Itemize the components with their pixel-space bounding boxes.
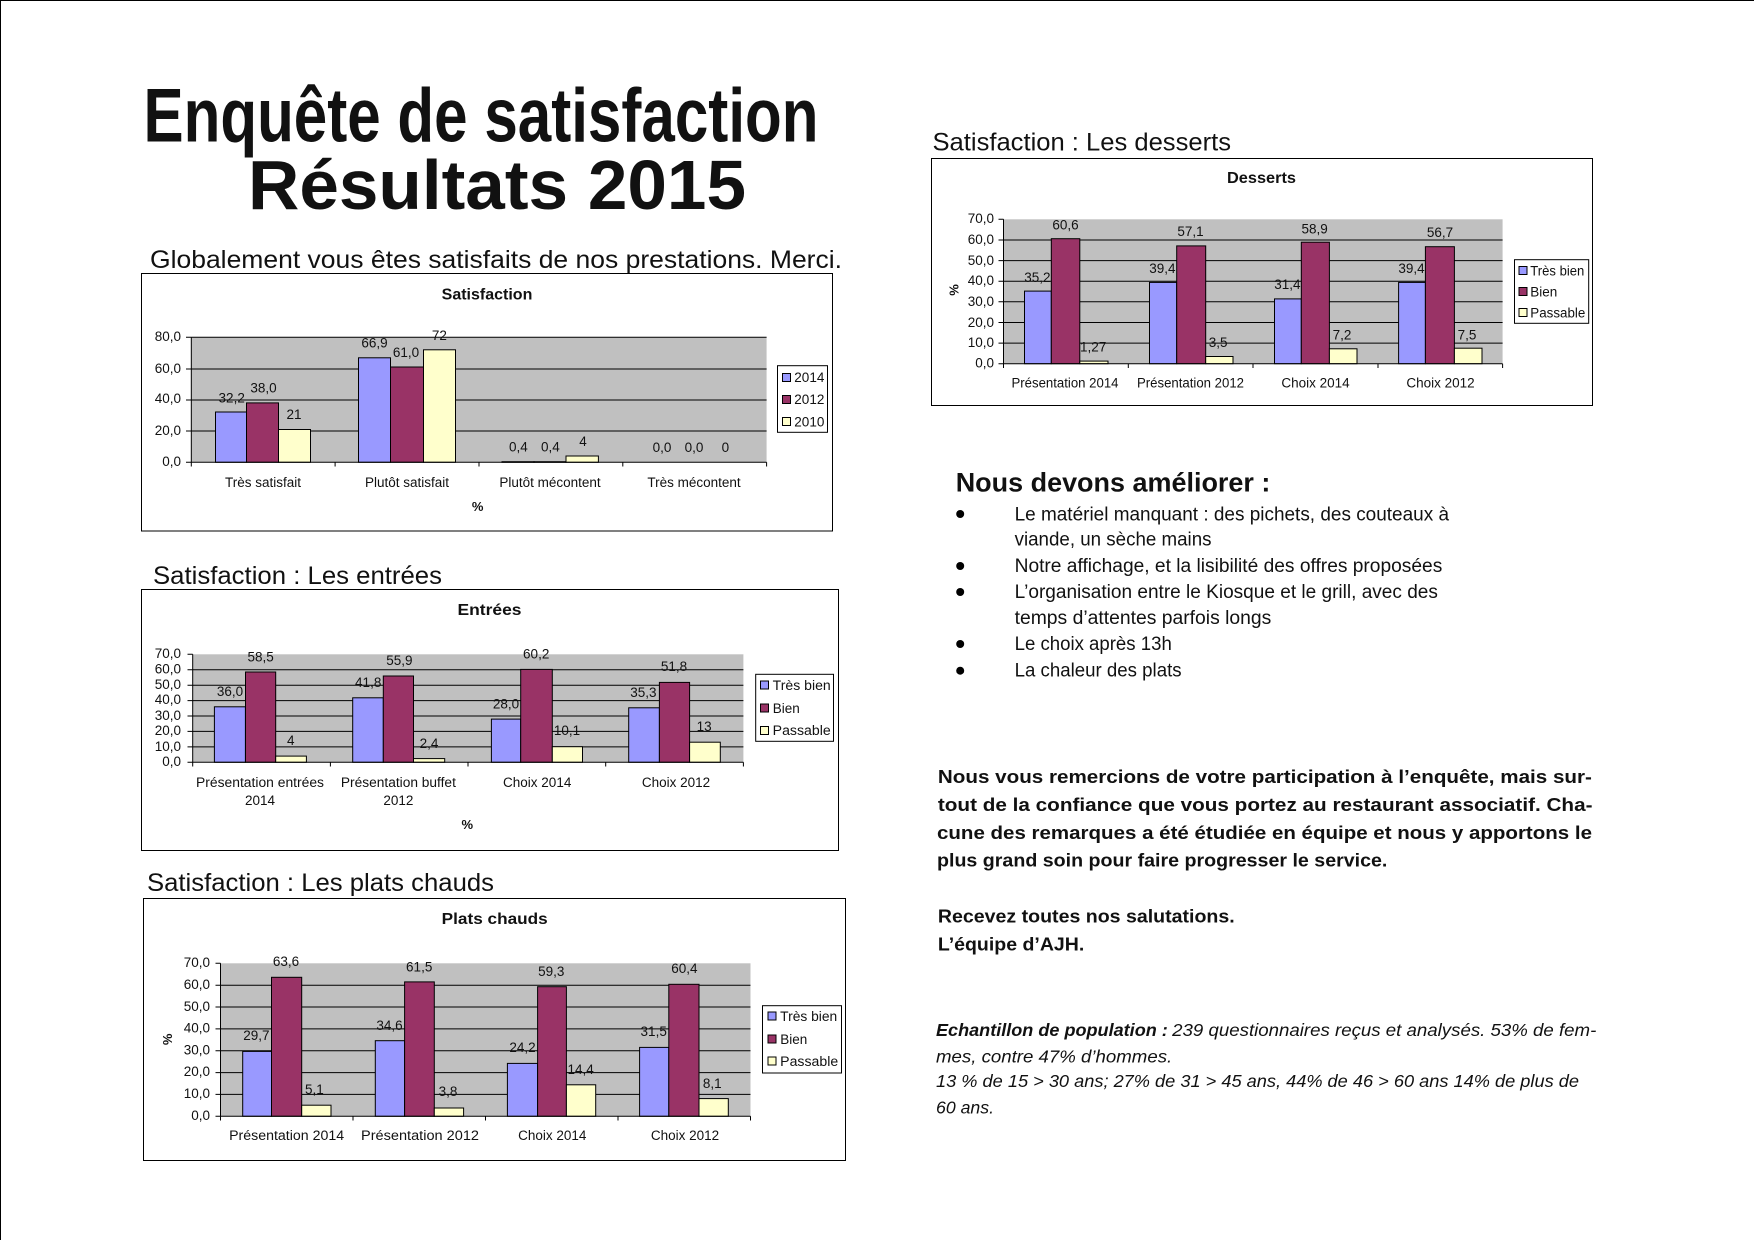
bullet list: viande, un sèche mains	[1015, 529, 1212, 550]
data labels	[1024, 218, 1476, 354]
legend: 2010	[794, 414, 824, 430]
category labels: Présentation entrées	[196, 775, 324, 790]
data labels: 39,4	[1398, 261, 1425, 276]
axes	[188, 654, 743, 766]
axes	[216, 963, 750, 1120]
data labels: 41,8	[355, 675, 381, 690]
axis label: %	[462, 817, 474, 832]
data labels: 8,1	[703, 1076, 722, 1091]
data labels: 7,5	[1458, 328, 1476, 342]
text block: thanks	[937, 766, 1592, 955]
legend: 2012	[794, 392, 824, 407]
panel: chart Desserts	[932, 158, 1592, 406]
text block: population sample: 239 questionnaires reçus et analysés. 53% de fem-	[1171, 1020, 1596, 1040]
y axis labels: 40,0	[968, 273, 994, 288]
bullet list: temps d’attentes parfois longs	[1015, 608, 1271, 629]
category labels: Plutôt mécontent	[499, 475, 601, 490]
y axis labels: 0,0	[162, 454, 181, 469]
title: Résultats 2015	[248, 146, 746, 224]
category labels: Choix 2012	[1406, 376, 1475, 390]
data labels: 32,2	[219, 390, 245, 406]
legend: Bien	[1530, 284, 1557, 300]
data labels: 2,4	[420, 736, 439, 751]
data labels: 63,6	[273, 954, 299, 969]
title	[144, 74, 818, 224]
text block: population sample: mes, contre 47% d’hommes.	[936, 1046, 1172, 1066]
y axis labels: 70,0	[155, 646, 181, 661]
bullet list: L’organisation entre le Kiosque et le grill, avec des	[1015, 582, 1438, 603]
text block: thanks: Recevez toutes nos salutations.	[938, 906, 1235, 927]
legend: Très bien	[773, 678, 831, 693]
data labels: 38,0	[250, 380, 277, 396]
y axis labels: 30,0	[155, 708, 181, 723]
data labels: 55,9	[386, 653, 413, 668]
legend	[778, 366, 828, 432]
legend: Bien	[773, 701, 800, 716]
bars	[1024, 239, 1482, 364]
y axis labels: 10,0	[184, 1086, 210, 1101]
data labels: 61,0	[393, 345, 419, 360]
data labels: 58,5	[247, 650, 274, 664]
plot area	[191, 337, 767, 462]
legend	[762, 1006, 842, 1073]
y axis labels: 20,0	[968, 315, 994, 330]
plot area	[193, 654, 743, 762]
data labels: 31,5	[641, 1024, 667, 1039]
data labels: 57,1	[1177, 224, 1204, 239]
text block: population sample: 13 % de 15 > 30 ans; 27% de 31 > 45 ans, 44% de 46 > 60 ans 14% de plus de	[936, 1071, 1579, 1091]
data labels: 5,1	[305, 1082, 324, 1097]
category labels: Très mécontent	[647, 475, 741, 490]
plot area	[1004, 219, 1503, 364]
data labels: 0	[722, 440, 729, 455]
category labels: Très satisfait	[225, 475, 301, 490]
category labels	[229, 1128, 719, 1143]
category labels: Présentation buffet	[341, 775, 456, 790]
text block: thanks: cune des remarques a été étudiée en équipe et nous y apportons le	[937, 822, 1592, 843]
text block: population sample: Echantillon de population :	[936, 1020, 1168, 1040]
data labels: 51,8	[661, 659, 687, 674]
data labels: 56,7	[1427, 225, 1453, 240]
category labels	[1012, 376, 1475, 390]
chart title: Satisfaction	[442, 286, 532, 304]
data labels: 36,0	[217, 684, 243, 699]
legend	[1514, 260, 1589, 323]
plot area	[220, 963, 750, 1116]
y axis labels: 30,0	[184, 1042, 210, 1058]
category labels: Plutôt satisfait	[365, 475, 449, 490]
y axis labels: 0,0	[162, 754, 181, 769]
bars	[216, 350, 598, 462]
data labels: 29,7	[243, 1028, 270, 1043]
heading: global satisfaction: Globalement vous êtes satisfaits de nos prestations. Merci.	[150, 246, 842, 274]
y axis labels: 20,0	[155, 423, 181, 438]
y axis labels: 30,0	[968, 294, 994, 309]
axis label: %	[946, 284, 962, 296]
data labels: 66,9	[361, 336, 388, 351]
data labels: 59,3	[538, 964, 564, 979]
legend	[756, 674, 834, 741]
bullet list: Notre affichage, et la lisibilité des offres proposées	[1015, 556, 1442, 577]
data labels: 3,8	[439, 1084, 457, 1099]
legend: Passable	[780, 1054, 838, 1069]
text block: thanks: L’équipe d’AJH.	[938, 934, 1084, 955]
axis label: %	[160, 1033, 175, 1045]
data labels: 0,4	[509, 440, 528, 455]
title: Enquête de satisfaction	[144, 74, 818, 159]
data labels	[217, 646, 712, 751]
data labels: 34,6	[376, 1018, 403, 1033]
bullet list: Le choix après 13h	[1015, 634, 1172, 655]
category labels: 2012	[383, 793, 413, 808]
category labels: Présentation 2012	[1137, 376, 1244, 390]
y axis labels: 70,0	[968, 211, 994, 226]
data labels: 72	[432, 328, 447, 343]
data labels: 0,0	[685, 440, 703, 455]
y axis labels: 60,0	[184, 977, 210, 992]
data labels: 61,5	[406, 960, 432, 974]
category labels: Présentation 2012	[361, 1128, 479, 1143]
axes	[186, 337, 767, 466]
y axis labels: 70,0	[184, 955, 210, 970]
data labels: 10,1	[554, 723, 580, 738]
category labels: Choix 2012	[651, 1128, 719, 1143]
data labels: 13	[697, 719, 712, 734]
legend: Passable	[1530, 306, 1585, 320]
text block: thanks: tout de la confiance que vous portez au restaurant associatif. Cha-	[938, 794, 1592, 815]
category labels: Choix 2014	[518, 1128, 587, 1143]
text block: population sample	[936, 1020, 1596, 1117]
y axis labels: 20,0	[155, 723, 181, 738]
data labels: 31,4	[1274, 277, 1301, 292]
bullet list: La chaleur des plats	[1015, 661, 1182, 682]
data labels: 24,2	[509, 1040, 536, 1055]
y axis labels	[184, 955, 210, 1123]
chart title: Plats chauds	[442, 911, 548, 928]
data labels: 4	[579, 434, 587, 449]
panel: chart Plats chauds	[144, 898, 846, 1160]
text block: thanks: Nous vous remercions de votre participation à l’enquête, mais sur-	[938, 766, 1592, 787]
heading: plats chauds: Satisfaction : Les plats chauds	[147, 869, 494, 897]
y axis labels: 80,0	[155, 329, 181, 344]
data labels	[219, 328, 729, 455]
panel: chart Entrées	[142, 590, 838, 850]
bullet list: Le matériel manquant : des pichets, des couteaux à	[1015, 504, 1449, 525]
category labels	[196, 775, 710, 808]
category labels: Présentation 2014	[229, 1128, 345, 1143]
chart title: Desserts	[1227, 170, 1296, 187]
y axis labels: 60,0	[968, 232, 994, 247]
y axis labels: 20,0	[184, 1064, 210, 1079]
data labels: 4	[287, 733, 295, 748]
data labels: 35,3	[630, 685, 657, 700]
data labels: 60,6	[1052, 218, 1079, 232]
axes	[998, 219, 1503, 368]
heading: desserts: Satisfaction : Les desserts	[932, 128, 1231, 156]
improvements heading: Nous devons améliorer :	[956, 468, 1270, 498]
text block: improvements	[956, 468, 1449, 682]
y axis labels	[968, 211, 994, 370]
category labels: Choix 2014	[1281, 376, 1350, 390]
data labels: 58,9	[1301, 222, 1328, 236]
data labels: 14,4	[567, 1062, 594, 1077]
category labels	[225, 475, 741, 490]
data labels: 60,2	[523, 646, 549, 662]
legend: Passable	[773, 723, 831, 738]
y axis labels: 50,0	[184, 999, 210, 1014]
data labels	[243, 954, 722, 1099]
y axis labels: 40,0	[155, 692, 181, 707]
legend: Bien	[780, 1032, 807, 1047]
text block: population sample: 60 ans.	[936, 1097, 994, 1117]
y axis labels: 60,0	[155, 361, 181, 376]
panel: chart Satisfaction	[142, 274, 832, 531]
y axis labels: 60,0	[155, 662, 181, 676]
data labels: 60,4	[671, 961, 698, 976]
legend: Très bien	[1530, 264, 1584, 278]
axis label: %	[472, 499, 484, 514]
category labels: Présentation 2014	[1012, 376, 1119, 390]
data labels: 7,2	[1333, 328, 1351, 342]
y axis labels: 10,0	[968, 335, 994, 350]
legend: 2014	[794, 370, 825, 385]
data labels: 21	[286, 407, 302, 422]
y axis labels: 10,0	[155, 739, 181, 754]
text block: thanks: plus grand soin pour faire progresser le service.	[937, 850, 1387, 871]
y axis labels: 0,0	[975, 356, 994, 370]
data labels: 0,0	[653, 440, 671, 455]
data labels: 1,27	[1080, 340, 1106, 354]
category labels: 2014	[245, 793, 276, 808]
y axis labels: 0,0	[191, 1108, 210, 1123]
bars	[214, 669, 720, 762]
bars	[243, 977, 728, 1116]
data labels: 35,2	[1024, 270, 1051, 285]
legend: Très bien	[780, 1009, 837, 1024]
y axis labels: 50,0	[155, 677, 181, 692]
heading: entrées: Satisfaction : Les entrées	[153, 562, 442, 590]
y axis labels: 50,0	[968, 253, 994, 268]
data labels: 0,4	[541, 440, 560, 455]
category labels: Choix 2012	[642, 775, 710, 790]
y axis labels	[155, 329, 181, 469]
chart title: Entrées	[458, 602, 522, 619]
data labels: 39,4	[1149, 261, 1176, 276]
data labels: 3,5	[1209, 335, 1228, 350]
bullet list	[956, 504, 1449, 682]
y axis labels: 40,0	[184, 1020, 210, 1036]
data labels: 28,0	[493, 696, 519, 712]
category labels: Choix 2014	[503, 775, 572, 790]
y axis labels	[155, 646, 181, 769]
y axis labels: 40,0	[155, 391, 181, 406]
